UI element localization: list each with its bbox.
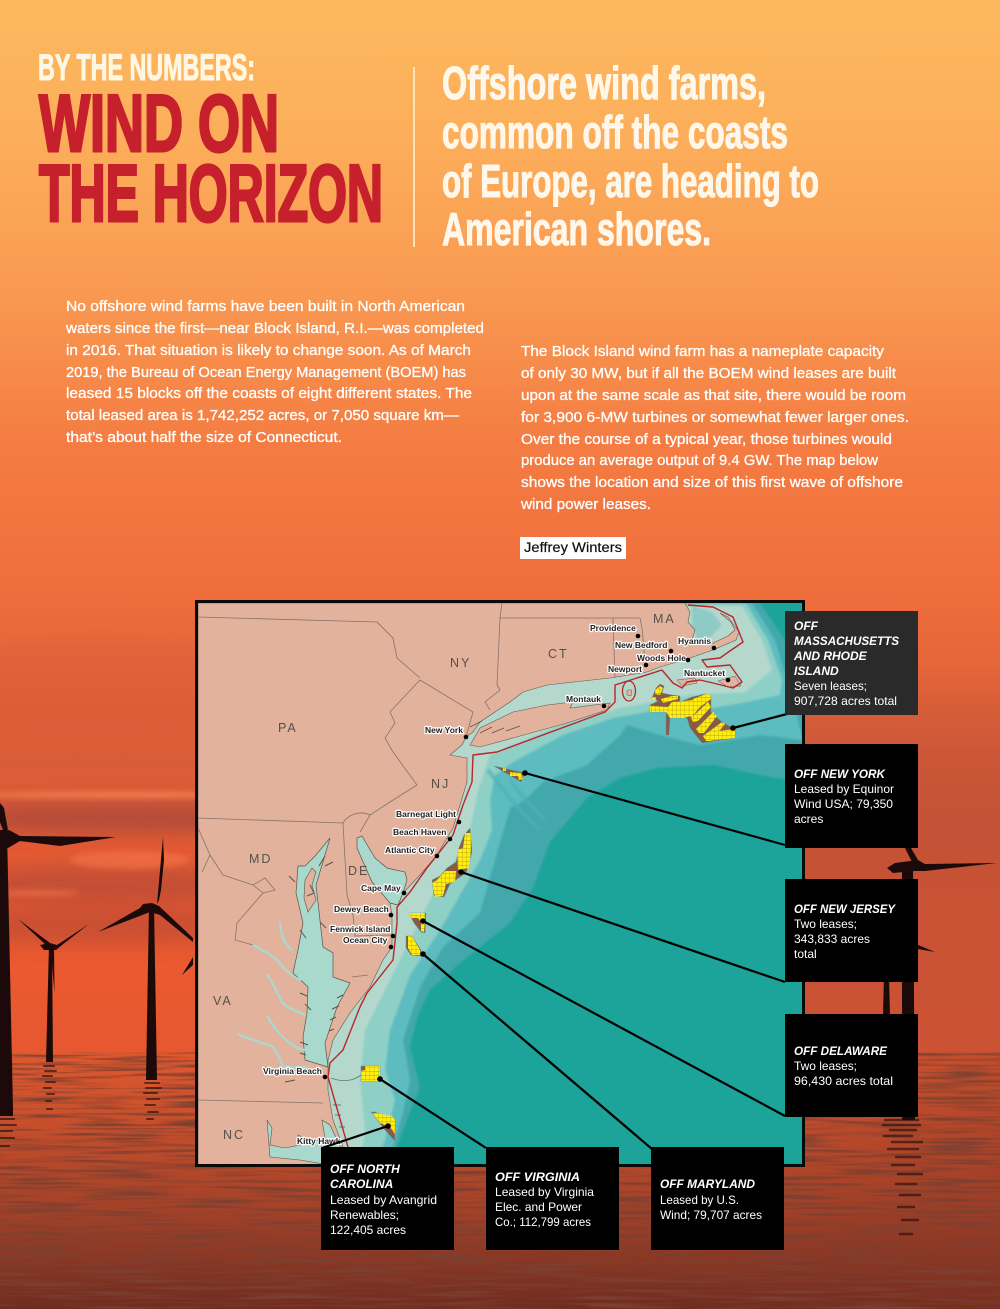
- upper bay land fragments: [304, 868, 316, 912]
- state labels: MA: [653, 612, 676, 626]
- land: [198, 603, 739, 1165]
- callout: massachusetts and rhode island: [785, 611, 918, 715]
- divider: [413, 67, 415, 247]
- body text: left column: in 2016. That situation is likely to change soon. As of March: [66, 343, 471, 359]
- callout: massachusetts and rhode island: AND RHODE: [793, 649, 868, 663]
- subtitle: American shores.: [442, 203, 711, 255]
- lease: massachusetts and rhode island: [650, 684, 735, 743]
- city labels: Hyannis: [678, 636, 711, 646]
- callout: virginia: [486, 1147, 619, 1250]
- state labels: MD: [249, 852, 272, 866]
- city labels: New York: [425, 725, 463, 735]
- body text: right column: The Block Island wind farm has a nameplate capacity: [521, 344, 885, 360]
- body text: left column: 2019, the Bureau of Ocean Energy Management (BOEM) has: [66, 365, 466, 381]
- map frame and deep water: [196, 602, 804, 1166]
- virginia cable route: [331, 1075, 361, 1081]
- city labels: Ocean City: [343, 935, 388, 945]
- bathymetry layers: [328, 603, 802, 1147]
- kicker: by the numbers: BY THE NUMBERS:: [38, 47, 255, 88]
- state labels: NC: [223, 1128, 245, 1142]
- city labels: Cape May: [361, 883, 401, 893]
- callout: north carolina: OFF NORTH: [330, 1162, 400, 1176]
- callout: new jersey: [785, 879, 918, 982]
- body text: left column: No offshore wind farms have been built in North American: [66, 299, 465, 315]
- islands: [627, 676, 741, 696]
- callout: maryland: Leased by U.S.: [660, 1193, 739, 1207]
- background wind turbines: [0, 803, 997, 1234]
- turbine: far left large: [0, 803, 116, 1116]
- city labels: Nantucket: [684, 668, 725, 678]
- long island: [470, 702, 610, 747]
- city labels: Beach Haven: [393, 827, 446, 837]
- callout: new york: Wind USA; 79,350: [794, 797, 893, 811]
- callout: delaware: OFF DELAWARE: [794, 1044, 888, 1058]
- city labels: Virginia Beach: [263, 1066, 322, 1076]
- subtitle: common off the coasts: [442, 106, 788, 158]
- callout: maryland: OFF MARYLAND: [660, 1177, 755, 1191]
- title block: [38, 47, 383, 239]
- callout: massachusetts and rhode island: ISLAND: [794, 664, 839, 678]
- callout: maryland: Wind; 79,707 acres: [660, 1208, 762, 1222]
- body text: left column: total leased area is 1,742,252 acres, or 7,050 square km—: [66, 408, 460, 424]
- body text: left column: waters since the first—near Block Island, R.I.—was completed: [65, 321, 484, 337]
- callout: delaware: 96,430 acres total: [794, 1074, 893, 1088]
- state labels: VA: [213, 994, 233, 1008]
- callout: virginia: Co.; 112,799 acres: [495, 1215, 591, 1229]
- city labels: Fenwick Island: [330, 924, 390, 934]
- byline: Jeffrey Winters: [524, 540, 622, 555]
- state labels: [213, 612, 676, 1142]
- callout: new york: Leased by Equinor: [794, 782, 894, 796]
- turbine: small left: [18, 919, 89, 1062]
- coastal boundary red line: [328, 605, 743, 1165]
- callout: north carolina: 122,405 acres: [330, 1223, 406, 1237]
- title line: wind on: WIND ON: [39, 79, 279, 169]
- city dots: [323, 634, 730, 1079]
- body text: right column: produce an average output of 9.4 GW. The map below: [521, 453, 879, 469]
- turbine: centre left: [98, 837, 193, 1080]
- callout: new jersey: OFF NEW JERSEY: [794, 902, 896, 916]
- title line: the horizon: THE HORIZON: [39, 149, 383, 239]
- body text: left column: [65, 299, 484, 446]
- subtitle: [442, 57, 819, 255]
- callout: maryland: [651, 1147, 784, 1250]
- callout: massachusetts and rhode island: Seven leases;: [794, 679, 867, 693]
- city labels: New Bedford: [615, 640, 667, 650]
- callout: virginia: OFF VIRGINIA: [495, 1170, 580, 1184]
- city labels: Dewey Beach: [334, 904, 389, 914]
- city labels: Barnegat Light: [396, 809, 456, 819]
- callout: virginia: Leased by Virginia: [495, 1185, 594, 1199]
- state labels: PA: [278, 721, 298, 735]
- city labels: [263, 623, 725, 1146]
- callout: new jersey: Two leases;: [794, 917, 857, 931]
- body text: right column: for 3,900 6-MW turbines or somewhat fewer larger ones.: [521, 410, 909, 426]
- body text: left column: that’s about half the size of Connecticut.: [66, 430, 342, 446]
- turbine: right far tower: [883, 975, 890, 1016]
- subtitle: Offshore wind farms,: [442, 57, 766, 109]
- lease: virginia: [361, 1066, 380, 1081]
- callout: north carolina: Renewables;: [330, 1208, 399, 1222]
- map panel: [196, 602, 804, 1166]
- state labels: DE: [348, 864, 369, 878]
- body text: left column: leased 15 blocks off the coasts of eight different states. The: [66, 386, 472, 402]
- subtitle: of Europe, are heading to: [442, 155, 819, 207]
- callout: virginia: Elec. and Power: [495, 1200, 582, 1214]
- north carolina sounds: [267, 1120, 342, 1165]
- body text: right column: [520, 344, 909, 513]
- callout: north carolina: CAROLINA: [330, 1177, 393, 1191]
- callout: new york: acres: [794, 812, 823, 826]
- lease: north carolina: [371, 1112, 395, 1141]
- body text: right column: wind power leases.: [520, 497, 651, 513]
- callout: north carolina: Leased by Avangrid: [330, 1193, 437, 1207]
- turbine: right large: [887, 848, 997, 1120]
- body text: right column: of only 30 MW, but if all the BOEM wind leases are built: [521, 366, 896, 382]
- city labels: Atlantic City: [385, 845, 435, 855]
- state borders: [198, 603, 645, 1103]
- state labels: CT: [548, 647, 569, 661]
- state labels: NY: [450, 656, 471, 670]
- body text: right column: upon at the same scale as that site, there would be room: [521, 388, 906, 404]
- turbine reflections in the water: [0, 1066, 922, 1234]
- body text: right column: shows the location and size of this first wave of offshore: [521, 475, 903, 491]
- callout: massachusetts and rhode island: 907,728 acres total: [794, 694, 897, 708]
- callout: north carolina: [321, 1147, 454, 1250]
- body text: right column: Over the course of a typical year, those turbines would: [521, 432, 892, 448]
- city labels: Montauk: [566, 694, 601, 704]
- lease: delaware: [409, 913, 426, 933]
- callout: new jersey: 343,833 acres: [794, 932, 870, 946]
- block island boundary: [622, 681, 636, 701]
- chesapeake and delaware bay water: [238, 721, 520, 1165]
- callout: massachusetts and rhode island: MASSACHUSETTS: [794, 634, 899, 648]
- callout: massachusetts and rhode island: OFF: [794, 619, 819, 633]
- city labels: Newport: [608, 664, 642, 674]
- callout: new york: OFF NEW YORK: [794, 767, 886, 781]
- callout: delaware: [785, 1014, 918, 1117]
- lease: maryland: [406, 936, 421, 956]
- state labels: NJ: [431, 777, 450, 791]
- city labels: Kitty Hawk: [297, 1136, 341, 1146]
- callout: delaware: Two leases;: [794, 1059, 857, 1073]
- city labels: Providence: [590, 623, 636, 633]
- lease: new jersey: [432, 828, 472, 897]
- city labels: Woods Hole: [637, 653, 686, 663]
- callout: new york: [785, 744, 918, 848]
- leader lines with dots: [322, 714, 787, 1149]
- byline: [520, 537, 626, 559]
- callout: new jersey: total: [794, 947, 817, 961]
- lease: new york: [494, 766, 525, 782]
